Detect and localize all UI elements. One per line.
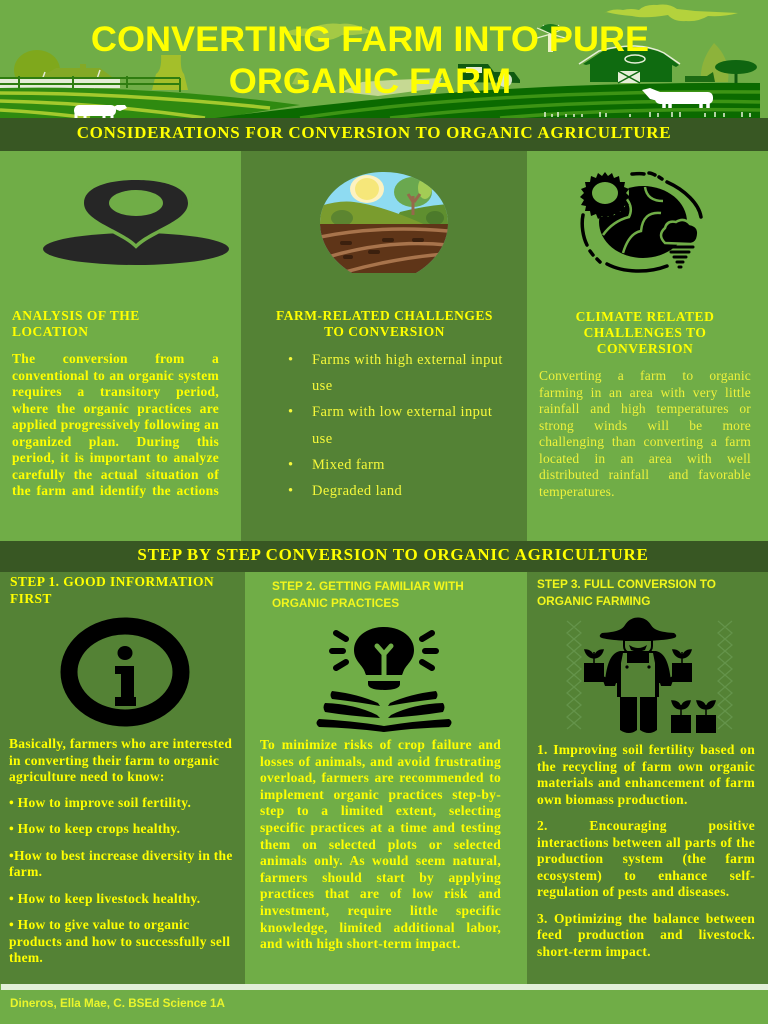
text: step 2 body: farmers should start by applying xyxy=(260,870,501,885)
section banner: step by step: STEP BY STEP CONVERSION TO ORGANIC AGRICULTURE xyxy=(137,545,649,564)
text: analysis body: carefully the actual situation of xyxy=(12,466,219,482)
text: analysis body: the farm and identify the actions xyxy=(12,483,219,498)
text: analysis body xyxy=(12,351,219,498)
text: climate body: challenging than converting a farm xyxy=(539,434,751,449)
text: analysis body: applied progressively following an xyxy=(12,417,219,432)
text: step 3 body: own biomass production. xyxy=(537,792,688,806)
text: analysis body: organized plan. During this xyxy=(12,434,219,448)
panel: step 1 xyxy=(0,572,245,984)
text: step 3 body: 3. Optimizing the balance between xyxy=(537,910,755,926)
list: farm types: use xyxy=(312,378,333,394)
farm landscape illustration xyxy=(0,4,760,118)
title: ORGANIC FARM xyxy=(229,62,511,101)
heading: farm-related challenges: TO CONVERSION xyxy=(324,324,445,339)
heading: farm-related challenges: FARM-RELATED CHALLENGES xyxy=(276,308,493,323)
heading: step 2: ORGANIC PRACTICES xyxy=(272,596,399,610)
heading: climate related challenges: CONVERSION xyxy=(597,341,693,356)
text: step 2 body: practices that are of low risk and xyxy=(260,886,501,901)
text: climate body: Converting a farm to organic xyxy=(539,368,751,383)
text: step 2 body: step to a limited extent, selecting xyxy=(260,803,501,818)
list: farm types xyxy=(288,352,503,499)
text: step 2 body: specific practices at a time and testing xyxy=(260,820,501,835)
text: step 1 body: • How to keep livestock healthy. xyxy=(9,890,200,906)
heading: climate related challenges xyxy=(576,309,714,356)
text: step 2 body: losses of animals, and avoid frustrating xyxy=(260,754,501,769)
text: climate body xyxy=(539,368,751,499)
text: step 3 body: 2. Encouraging positive xyxy=(537,818,755,833)
list: farm types: Farm with low external input xyxy=(312,404,492,420)
panel: analysis of the location xyxy=(0,151,241,541)
icon: climate globe with sun and tornado xyxy=(580,171,703,273)
text: step 2 body: implement organic practices step-by- xyxy=(260,787,501,802)
icon: light bulb over open book xyxy=(316,627,452,732)
heading: analysis of the location: LOCATION xyxy=(12,324,89,339)
text: step 2 body xyxy=(260,737,501,951)
text: step 1 body: farm. xyxy=(9,864,42,879)
heading: step 1 xyxy=(10,574,214,606)
footer: author credit: Dineros, Ella Mae, C. BSEd Science 1A xyxy=(10,997,225,1010)
text: step 3 body xyxy=(537,742,755,959)
heading: analysis of the location xyxy=(12,308,140,339)
panel: farm-related challenges xyxy=(241,151,527,541)
text: analysis body: where the organic practices are xyxy=(12,400,219,416)
list: farm types: Farms with high external input xyxy=(312,352,503,368)
text: step 1 body: agriculture need to know: xyxy=(9,769,165,784)
list: farm types: • xyxy=(288,457,293,473)
text: step 2 body: and with high short-term impact. xyxy=(260,936,461,951)
text: step 1 body xyxy=(9,736,233,965)
text: climate body: strong winds will be more xyxy=(539,418,751,432)
title: CONVERTING FARM INTO PURE xyxy=(91,20,649,59)
header banner: farm scene with title xyxy=(0,4,760,118)
section banner: step by step xyxy=(0,541,768,572)
text: step 2 body: overload, farmers are recommended to xyxy=(260,770,501,785)
heading: step 1: FIRST xyxy=(10,591,52,606)
text: step 1 body: • How to improve soil fertility. xyxy=(9,794,191,810)
text: climate body: rainfall and high temperatures or xyxy=(539,401,751,416)
list: farm types: Mixed farm xyxy=(312,457,385,473)
list: farm types: • xyxy=(288,483,293,499)
text: step 1 body: in converting their farm to organic xyxy=(9,752,219,768)
panel: climate related challenges xyxy=(527,151,768,541)
list: farm types: Degraded land xyxy=(312,483,402,499)
section banner: considerations: CONSIDERATIONS FOR CONVERSION TO ORGANIC AGRICULTURE xyxy=(77,123,671,142)
text: step 3 body: production system (the farm xyxy=(537,851,755,866)
section banner: considerations xyxy=(0,118,768,151)
heading: step 3 xyxy=(537,577,716,608)
icon: farmer holding plants xyxy=(566,618,732,733)
text: analysis body: period, it is important to analyze xyxy=(12,450,219,465)
text: step 1 body: them. xyxy=(9,950,43,965)
icon: information circle xyxy=(60,618,190,726)
icon: farm landscape circle xyxy=(320,172,448,273)
text: step 2 body: knowledge, limited additional labor, xyxy=(260,920,501,935)
heading: step 2 xyxy=(272,579,464,610)
text: step 3 body: the recycling of farm own organic xyxy=(537,758,755,774)
text: step 3 body: short-term impact. xyxy=(537,944,651,958)
icon: location pin xyxy=(43,180,229,265)
title xyxy=(91,20,649,101)
text: step 1 body: • How to keep crops healthy. xyxy=(9,821,180,836)
text: step 2 body: To minimize risks of crop failure and xyxy=(260,737,501,752)
heading: step 2: STEP 2. GETTING FAMILIAR WITH xyxy=(272,579,464,593)
text: step 2 body: investment, require little specific xyxy=(260,903,501,918)
text: step 1 body: products and how to successfully sell xyxy=(9,934,230,948)
text: step 3 body: interactions between all parts of the xyxy=(537,834,755,850)
text: climate body: temperatures. xyxy=(539,484,615,498)
heading: step 3: ORGANIC FARMING xyxy=(537,594,650,608)
list: farm types: • xyxy=(288,404,293,420)
list: farm types: • xyxy=(288,352,293,368)
heading: climate related challenges: CLIMATE RELATED xyxy=(576,309,714,324)
text: analysis body: The conversion from a xyxy=(12,351,219,366)
panel: step 3 xyxy=(527,572,768,984)
heading: analysis of the location: ANALYSIS OF THE xyxy=(12,308,140,323)
text: climate body: distributed rainfall and favorable xyxy=(539,467,751,482)
heading: step 3: STEP 3. FULL CONVERSION TO xyxy=(537,577,716,591)
text: step 3 body: regulation of pests and diseases. xyxy=(537,884,729,899)
heading: step 1: STEP 1. GOOD INFORMATION xyxy=(10,574,214,589)
text: step 1 body: •How to best increase diversity in the xyxy=(9,848,233,862)
list: farm types: use xyxy=(312,431,333,447)
text: climate body: located in an area with well xyxy=(539,450,751,466)
text: step 3 body: 1. Improving soil fertility based on xyxy=(537,742,755,757)
text: climate body: farming in an area with very little xyxy=(539,384,751,400)
text: step 1 body: • How to give value to organic xyxy=(9,917,189,932)
text: analysis body: conventional to an organic system xyxy=(12,368,219,382)
text: step 2 body: them on selected plots or selected xyxy=(260,837,501,852)
text: step 3 body: ecosystem) to enhance self- xyxy=(537,868,755,882)
text: step 1 body: Basically, farmers who are interested xyxy=(9,736,232,751)
panel: step 2 xyxy=(245,572,527,984)
text: analysis body: requires a transitory period, xyxy=(12,384,219,399)
text: step 3 body: feed production and livestock. xyxy=(537,927,755,942)
footer strip: white divider xyxy=(1,984,768,990)
heading: climate related challenges: CHALLENGES TO xyxy=(584,325,706,340)
text: step 2 body: animals only. As would seem natural, xyxy=(260,853,501,868)
text: step 3 body: materials and enhancement of farm xyxy=(537,775,755,790)
heading: farm-related challenges xyxy=(276,308,493,339)
